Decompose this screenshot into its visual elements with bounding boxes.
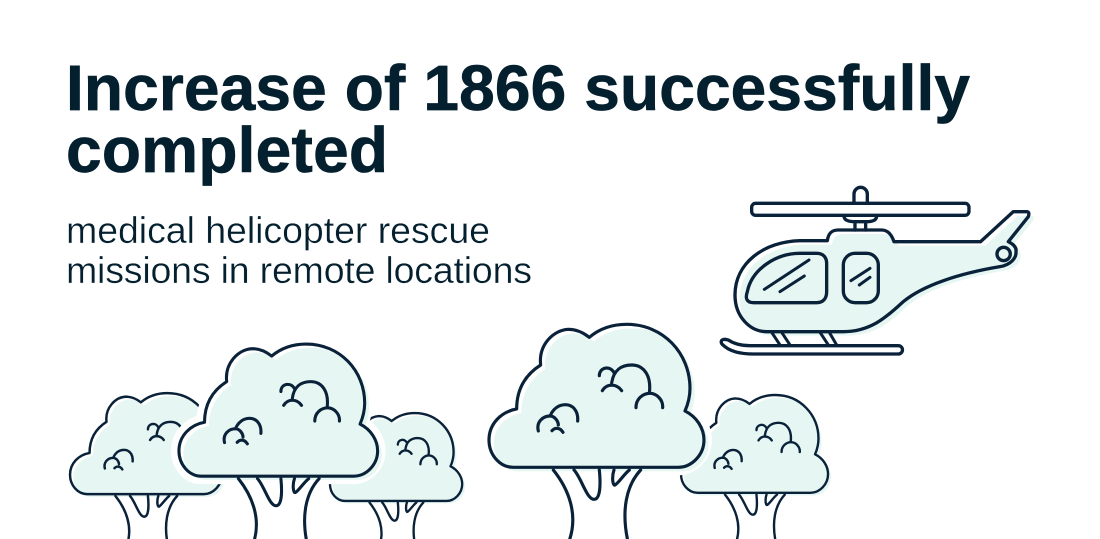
icon: tree right of centre group — [330, 413, 465, 539]
icon: tree large left — [179, 344, 382, 539]
icon: tree large centre — [489, 324, 709, 539]
icon: tree far right — [681, 395, 831, 539]
subtitle text — [66, 209, 532, 291]
subtitle text: medical helicopter rescue — [66, 209, 490, 251]
icon: tree far left — [70, 393, 225, 539]
icon: helicopter — [721, 187, 1034, 354]
title: Increase of 1866 successfully — [66, 52, 970, 124]
title: completed — [66, 114, 388, 186]
title — [66, 52, 970, 186]
subtitle text: missions in remote locations — [66, 249, 532, 291]
